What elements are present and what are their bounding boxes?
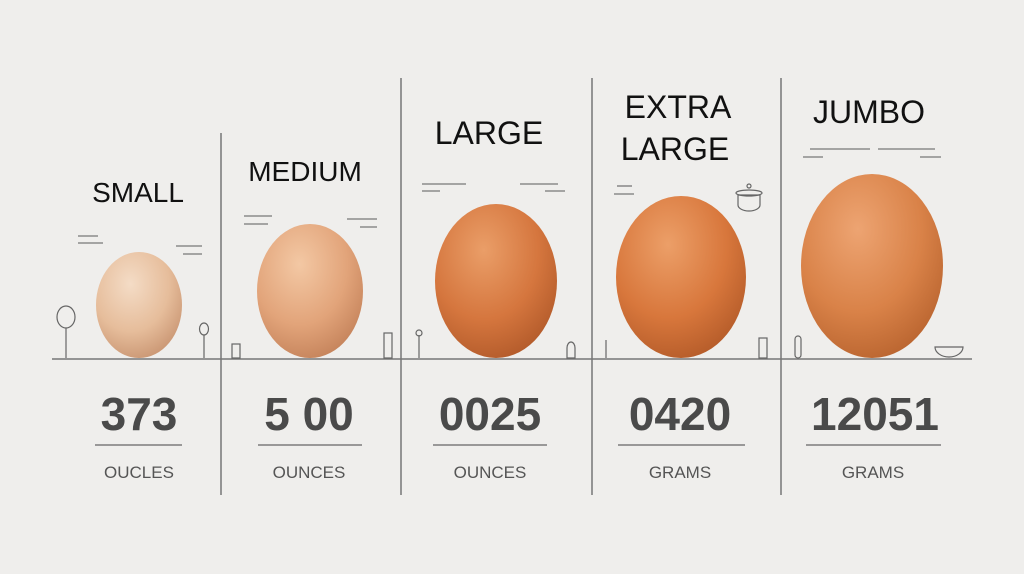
- egg: medium: [257, 224, 363, 358]
- unit: large: OUNCES: [454, 463, 526, 482]
- number: extra large: 0420: [629, 388, 731, 440]
- number: jumbo: 12051: [811, 388, 939, 440]
- panel: small: [57, 177, 208, 482]
- unit: medium: OUNCES: [273, 463, 345, 482]
- panel: extra large: [606, 89, 767, 482]
- number: large: 0025: [439, 388, 541, 440]
- panel: medium: [232, 156, 392, 482]
- icon: whisk: [57, 306, 75, 358]
- icon: bowl: [795, 336, 963, 358]
- title: large: LARGE: [435, 115, 543, 151]
- title: extra large: EXTRA: [625, 89, 732, 125]
- unit: small: OUCLES: [104, 463, 174, 482]
- egg: small: [96, 252, 182, 358]
- title: medium: MEDIUM: [248, 156, 362, 187]
- panel: jumbo: [795, 94, 963, 482]
- egg: jumbo: [801, 174, 943, 358]
- unit: extra large: GRAMS: [649, 463, 711, 482]
- number: medium: 5 00: [264, 388, 354, 440]
- icon: cup: [232, 333, 392, 358]
- panel: large: [416, 115, 575, 482]
- panel: extra large: LARGE: [621, 131, 729, 167]
- egg: extra large: [616, 196, 746, 358]
- icon: utensils: [416, 330, 575, 358]
- number: small: 373: [101, 388, 177, 440]
- title: jumbo: JUMBO: [813, 94, 925, 130]
- egg: large: [435, 204, 557, 358]
- icon: pot: [606, 184, 767, 358]
- icon: spoon: [200, 323, 208, 358]
- unit: jumbo: GRAMS: [842, 463, 904, 482]
- title: small: SMALL: [92, 177, 184, 208]
